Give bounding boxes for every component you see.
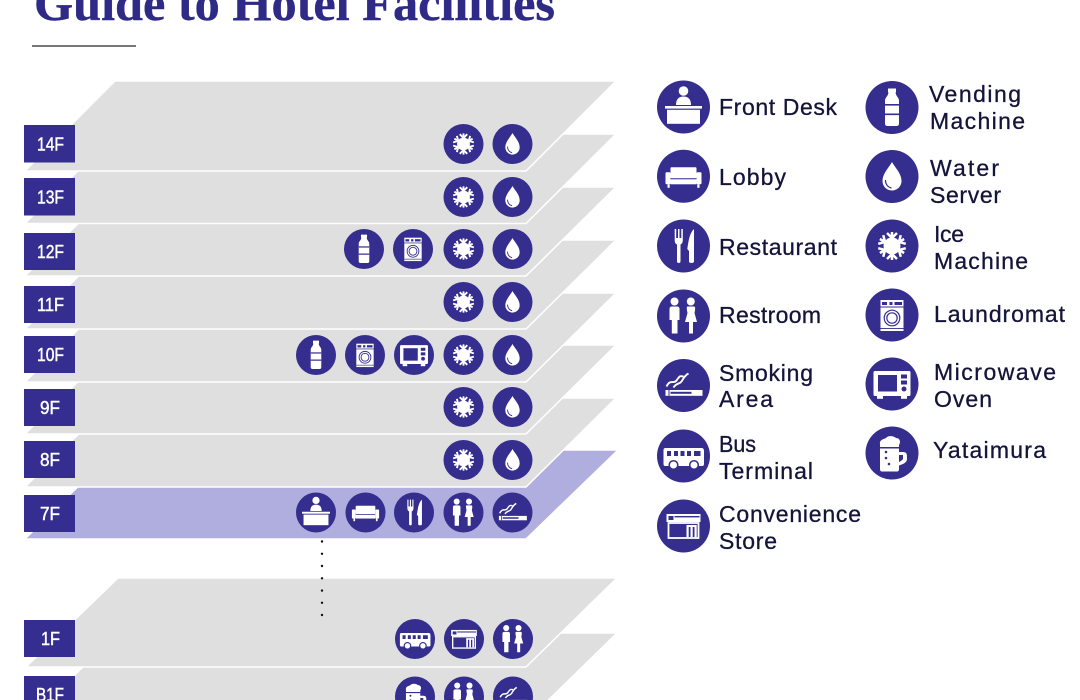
legend: Microwave Oven: Oven	[934, 386, 992, 412]
icons row: 13F	[443, 177, 533, 217]
icons row: 1F	[395, 619, 533, 659]
floor label: 10F: 10F	[37, 345, 64, 365]
floor label: 8F: 8F	[40, 450, 60, 470]
legend: Water Server	[866, 150, 1001, 208]
legend: Ice Machine	[866, 220, 1028, 274]
legend: Restaurant	[657, 220, 838, 272]
floor plate: 14F	[25, 81, 616, 171]
floor plate: 13F	[25, 134, 616, 224]
legend: Ice Machine: Ice	[934, 221, 964, 247]
floor label: 12F	[24, 233, 75, 270]
icons row: 10F	[296, 335, 533, 375]
icons row: 14F	[443, 124, 533, 164]
floor label: 7F: 7F	[40, 504, 60, 524]
floor label: 11F: 11F	[37, 295, 64, 315]
legend: Smoking Area: Area	[719, 386, 773, 412]
floor label: 1F	[24, 620, 75, 657]
floor label: 14F: 14F	[37, 134, 64, 154]
floor plate: 10F	[25, 293, 616, 382]
legend: Bus Terminal	[657, 430, 813, 484]
legend: Vending Machine: Vending	[929, 81, 1021, 107]
floor label: 13F: 13F	[37, 188, 64, 208]
floor label: 13F	[24, 178, 75, 216]
legend: Lobby	[657, 150, 786, 203]
legend: Front Desk	[657, 80, 838, 134]
icons row: 9F	[443, 387, 533, 427]
legend: Lobby: Lobby	[719, 164, 786, 190]
floor label: 1F: 1F	[41, 629, 60, 649]
legend: Microwave Oven	[866, 358, 1056, 412]
legend: Vending Machine: Machine	[930, 108, 1025, 134]
icons row: 12F	[344, 229, 533, 269]
floor label: 10F	[24, 336, 75, 373]
legend: Convenience Store: Store	[719, 528, 777, 554]
icons row: 11F	[443, 282, 533, 322]
floor plate: B1F	[26, 633, 617, 700]
legend: Microwave Oven: Microwave	[934, 359, 1056, 385]
legend: Bus Terminal: Bus	[719, 431, 756, 457]
legend: Vending Machine	[866, 81, 1025, 134]
floor label: 8F	[24, 441, 75, 478]
legend: Ice Machine: Machine	[934, 248, 1028, 274]
floor plate: 7F highlighted	[25, 450, 618, 539]
floor plate: 8F	[25, 398, 616, 487]
legend: Laundromat	[866, 288, 1066, 342]
dotted continuation line	[321, 540, 323, 616]
icons row: B1F	[395, 676, 533, 700]
legend: Convenience Store	[657, 500, 861, 554]
floor label: 9F: 9F	[40, 398, 60, 418]
floor label: 9F	[24, 389, 75, 426]
title underline rule	[32, 45, 136, 47]
legend: Convenience Store: Convenience	[719, 501, 861, 527]
legend: Bus Terminal: Terminal	[719, 458, 813, 484]
floor plate: 1F	[26, 578, 617, 667]
floor label: 14F	[24, 125, 75, 162]
legend: Front Desk: Front Desk	[719, 94, 838, 120]
floor plate: 11F	[25, 240, 616, 329]
floor plate: 12F	[25, 187, 616, 276]
icons row: 7F	[296, 492, 533, 533]
icons row: 8F	[443, 440, 533, 480]
legend: Smoking Area	[657, 359, 813, 412]
legend: Smoking Area: Smoking	[719, 360, 813, 386]
legend: Yataimura	[866, 426, 1046, 480]
legend: Restroom	[657, 290, 821, 342]
legend: Yataimura: Yataimura	[933, 437, 1046, 463]
legend: Restaurant: Restaurant	[719, 234, 838, 260]
legend: Water Server: Water	[930, 155, 999, 181]
floor label: 7F	[24, 495, 75, 532]
legend: Laundromat: Laundromat	[934, 301, 1066, 327]
floor plate: 9F	[25, 345, 616, 434]
floor label: 12F: 12F	[37, 242, 64, 262]
floor stack diagram	[25, 81, 618, 700]
floor label: B1F	[24, 676, 75, 700]
floor label: 11F	[24, 286, 75, 323]
legend: Restroom: Restroom	[719, 302, 821, 328]
legend: Water Server: Server	[930, 182, 1001, 208]
